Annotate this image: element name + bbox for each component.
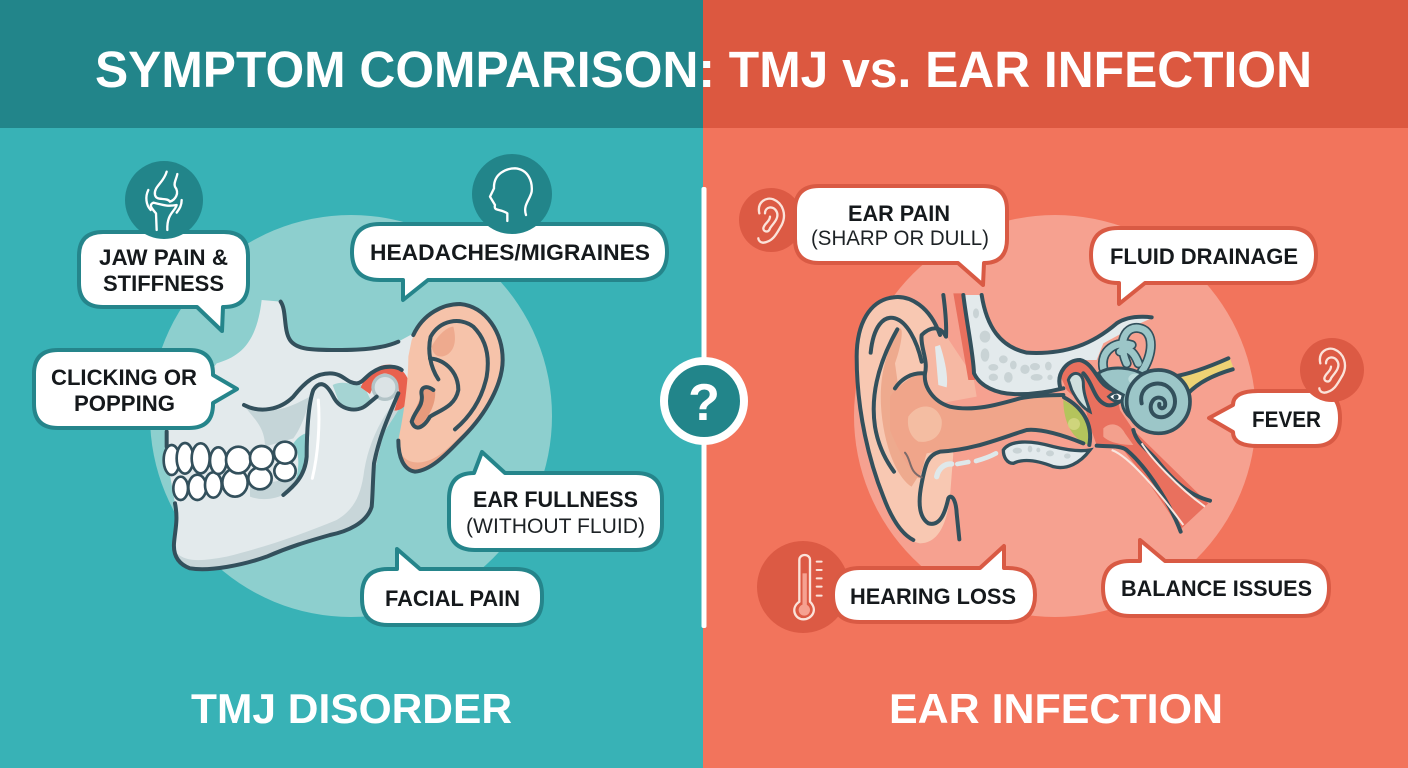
icon: question mark badge (664, 361, 744, 441)
header band: TMJ side (0, 0, 703, 128)
pinna (857, 297, 953, 543)
callout: clicking or popping: CLICKING OR (51, 365, 197, 390)
callout: jaw pain and stiffness (79, 232, 248, 331)
tragus (922, 331, 977, 403)
heading: ear infection: EAR INFECTION (889, 685, 1223, 732)
middle ear and eustachian tube (1060, 361, 1208, 530)
callout: headaches and migraines: HEADACHES/MIGRAINES (370, 240, 650, 265)
auditory nerve (1173, 358, 1234, 395)
teeth (164, 442, 296, 500)
panel: TMJ disorder background (0, 0, 703, 768)
illustration: ear cross-section (857, 293, 1234, 543)
callout: clicking or popping: POPPING (74, 391, 175, 416)
callout: fluid drainage (1091, 228, 1316, 304)
callout: hearing loss: HEARING LOSS (850, 584, 1016, 609)
cochlea (1127, 370, 1190, 433)
callout: hearing loss (833, 546, 1035, 622)
panel: ear infection background (703, 0, 1408, 768)
inner ear: semicircular canals (1103, 328, 1151, 372)
callout: ear pain: EAR PAIN (848, 201, 950, 226)
ear canal (890, 373, 1088, 478)
header band: ear infection side (703, 0, 1408, 128)
heading: TMJ disorder: TMJ DISORDER (191, 685, 512, 732)
callout: ear pain: (SHARP OR DULL) (811, 227, 989, 250)
callout: ear fullness (449, 452, 662, 550)
illustration: jaw and skull (164, 300, 417, 570)
canal walls (963, 295, 1063, 394)
callout: facial pain (362, 549, 542, 625)
divider line (702, 187, 706, 628)
icon: ear badge (fever) (1300, 338, 1364, 402)
callout: ear pain (795, 186, 1007, 285)
title: SYMPTOM COMPARISON: TMJ vs. EAR INFECTION (95, 41, 1312, 98)
lower bone (1003, 442, 1090, 468)
ear drum (1063, 400, 1090, 445)
backdrop circle: TMJ (150, 215, 552, 617)
callout: ear fullness: (WITHOUT FLUID) (466, 515, 645, 538)
ossicles (1068, 373, 1090, 412)
icon: question mark badge: ? (688, 374, 720, 432)
illustration: outer ear (TMJ side) (398, 304, 503, 472)
callout: facial pain: FACIAL PAIN (385, 586, 520, 611)
callout: clicking or popping (34, 350, 237, 428)
backdrop circle: ear infection (854, 215, 1256, 617)
icon: thermometer (757, 541, 849, 633)
lower canal highlights (937, 464, 952, 477)
callout: ear fullness: EAR FULLNESS (473, 487, 638, 512)
callout: jaw pain and stiffness: STIFFNESS (103, 271, 224, 296)
callout: balance issues (1103, 540, 1329, 616)
callout: fever (1209, 391, 1340, 446)
callout: balance issues: BALANCE ISSUES (1121, 576, 1312, 601)
icon: head profile (472, 154, 552, 234)
callout: fever: FEVER (1252, 407, 1321, 432)
vestibule (1098, 368, 1160, 420)
TMJ disc (361, 365, 410, 411)
callout: headaches and migraines (352, 224, 667, 300)
callout: fluid drainage: FLUID DRAINAGE (1110, 244, 1298, 269)
icon: ear badge (739, 188, 803, 252)
upper bone (963, 295, 1153, 394)
callout: jaw pain and stiffness: JAW PAIN & (99, 245, 228, 270)
icon: joint (125, 161, 203, 239)
